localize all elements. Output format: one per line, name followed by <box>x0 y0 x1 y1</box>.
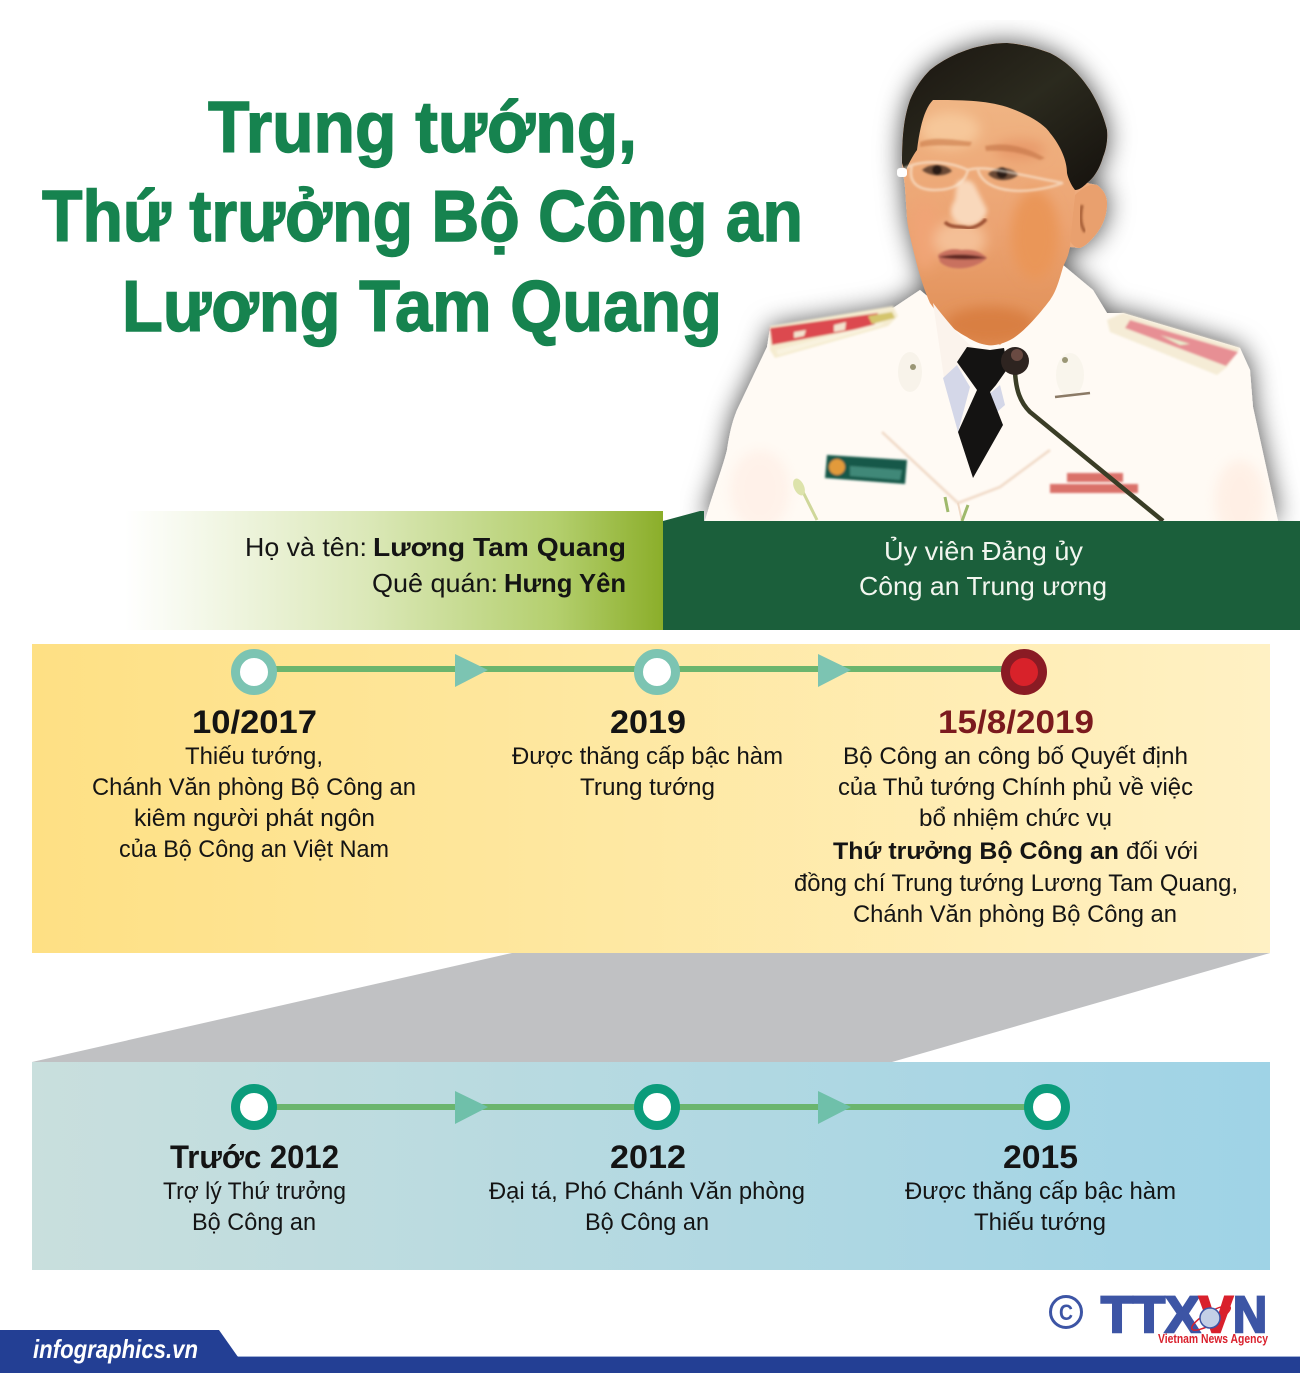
title <box>42 88 803 347</box>
info band: party role: Ủy viên Đảng ủy <box>884 535 1083 566</box>
zoom connector <box>32 953 1270 1062</box>
info band: personal details: Quê quán: <box>372 568 498 598</box>
event 10/2017: 10/2017 <box>192 704 317 740</box>
event 15/8/2019: của Thủ tướng Chính phủ về việc <box>838 774 1193 801</box>
portrait illustration <box>705 43 1278 540</box>
microphone <box>1001 347 1163 521</box>
event 15/8/2019: Bộ Công an công bố Quyết định <box>843 743 1188 770</box>
title: Trung tướng, <box>208 88 637 168</box>
shirt <box>943 365 1005 432</box>
uniform shading <box>734 455 1263 521</box>
marker 2019 <box>638 654 676 690</box>
agency wordmark: N <box>1233 1286 1267 1343</box>
event before 2012 <box>163 1139 346 1236</box>
panel: recent timeline <box>32 644 1270 953</box>
ribbons <box>1050 473 1138 493</box>
event 2012: 2012 <box>610 1139 686 1175</box>
shirt and collar <box>933 303 955 330</box>
event 2019 <box>512 704 783 801</box>
event 2012 <box>489 1139 805 1236</box>
agency tagline: Vietnam News Agency <box>1158 1332 1268 1346</box>
info band: personal details <box>125 511 663 630</box>
event 2015: Được thăng cấp bậc hàm <box>905 1178 1176 1205</box>
event 10/2017: của Bộ Công an Việt Nam <box>119 836 389 863</box>
left epaulette <box>770 306 898 358</box>
collar lapels <box>882 432 1050 503</box>
event 15/8/2019: bổ nhiệm chức vụ <box>919 805 1112 832</box>
right epaulette <box>1107 313 1240 375</box>
panel: earlier timeline <box>32 1062 1270 1270</box>
info band: party role <box>663 511 1300 630</box>
timeline connector <box>270 654 1015 687</box>
event 15/8/2019: Thứ trưởng Bộ Công an <box>833 838 1119 865</box>
logo: TTXVN <box>1050 1286 1268 1346</box>
event 2015 <box>905 1139 1176 1236</box>
event 15/8/2019: đối với <box>1126 838 1198 865</box>
event 10/2017: kiêm người phát ngôn <box>134 805 375 832</box>
marker 10/2017 <box>236 654 272 690</box>
info band: personal details: Họ và tên: <box>245 532 367 562</box>
copyright mark: C <box>1059 1300 1073 1325</box>
event 15/8/2019: đồng chí Trung tướng Lương Tam Quang, <box>794 870 1238 897</box>
event 2012: Bộ Công an <box>585 1209 709 1236</box>
event 2015: 2015 <box>1003 1139 1078 1175</box>
info band: personal details: Hưng Yên <box>504 568 626 598</box>
agency wordmark: V <box>1199 1286 1233 1343</box>
event 2019: Trung tướng <box>580 774 715 801</box>
title: Thứ trưởng Bộ Công an <box>42 177 803 257</box>
glasses temple highlight <box>897 168 907 177</box>
event 15/8/2019: Chánh Văn phòng Bộ Công an <box>853 901 1177 928</box>
marker 15/8/2019 <box>1006 654 1042 690</box>
globe <box>1189 1302 1233 1334</box>
agency wordmark <box>1101 1286 1267 1343</box>
title: Lương Tam Quang <box>122 267 722 347</box>
hair <box>902 43 1107 190</box>
event 15/8/2019 <box>794 704 1238 928</box>
event 10/2017: Thiếu tướng, <box>185 743 323 770</box>
event 2012: Đại tá, Phó Chánh Văn phòng <box>489 1178 805 1205</box>
marker before 2012 <box>236 1088 272 1126</box>
marker 2015 <box>1028 1088 1066 1126</box>
event 10/2017: Chánh Văn phòng Bộ Công an <box>92 774 416 801</box>
event before 2012: Trợ lý Thứ trưởng <box>163 1178 346 1205</box>
tie <box>957 347 1008 478</box>
agency wordmark: TTX <box>1101 1286 1200 1343</box>
copyright mark <box>1050 1296 1082 1328</box>
info band: personal details: Lương Tam Quang <box>373 532 626 562</box>
ear <box>1070 185 1107 248</box>
event 2015: Thiếu tướng <box>974 1209 1106 1236</box>
marker 2012 <box>638 1088 676 1126</box>
collar insignia <box>898 352 1090 397</box>
silhouette with shadow <box>705 43 1278 521</box>
glasses <box>898 162 1063 191</box>
face and neck <box>905 100 1072 346</box>
event 15/8/2019: 15/8/2019 <box>938 704 1094 740</box>
website label: infographics.vn <box>33 1334 198 1364</box>
event 2019: 2019 <box>610 704 686 740</box>
footer bar <box>0 1330 1300 1373</box>
decoration leaf <box>791 477 968 521</box>
name plate <box>825 455 907 484</box>
info band: party role: Công an Trung ương <box>859 571 1107 601</box>
event 10/2017 <box>92 704 416 863</box>
timeline connector <box>270 1091 1040 1124</box>
event before 2012: Trước 2012 <box>170 1139 339 1175</box>
event 2019: Được thăng cấp bậc hàm <box>512 743 783 770</box>
facial features <box>920 139 1045 268</box>
event before 2012: Bộ Công an <box>192 1209 316 1236</box>
